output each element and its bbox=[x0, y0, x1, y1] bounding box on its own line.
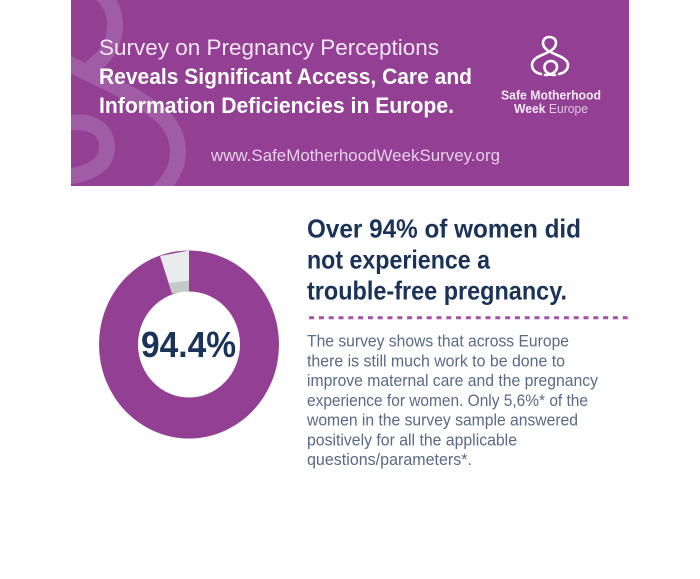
heading: not experience a bbox=[307, 244, 490, 274]
logo: Week Europe bbox=[514, 102, 588, 116]
remaining segment bbox=[160, 250, 189, 294]
logo bbox=[501, 37, 601, 116]
body text: questions/parameters*. bbox=[307, 450, 472, 469]
donut value: 94.4% bbox=[141, 324, 236, 365]
body text: women in the survey sample answered bbox=[306, 411, 578, 430]
body text: positively for all the applicable bbox=[307, 430, 517, 449]
icon: mother and child bbox=[532, 37, 568, 75]
heading: trouble-free pregnancy. bbox=[307, 276, 567, 306]
banner title bbox=[99, 35, 472, 118]
heading: Over 94% of women did bbox=[307, 214, 581, 244]
body text bbox=[306, 332, 598, 469]
header banner bbox=[60, 0, 629, 192]
body text: experience for women. Only 5,6%* of the bbox=[307, 391, 588, 410]
banner title: Survey on Pregnancy Perceptions bbox=[99, 35, 439, 60]
heading bbox=[307, 214, 581, 306]
body text: improve maternal care and the pregnancy bbox=[307, 371, 598, 390]
donut chart bbox=[99, 250, 279, 438]
decorative swirl bbox=[60, 0, 178, 192]
banner title: Reveals Significant Access, Care and bbox=[99, 64, 472, 89]
logo text: Safe Motherhood bbox=[501, 88, 601, 102]
body text: there is still much work to be done to bbox=[307, 351, 565, 370]
banner title: Information Deficiencies in Europe. bbox=[99, 93, 454, 118]
website url: www.SafeMotherhoodWeekSurvey.org bbox=[210, 146, 500, 165]
body text: The survey shows that across Europe bbox=[307, 332, 569, 350]
